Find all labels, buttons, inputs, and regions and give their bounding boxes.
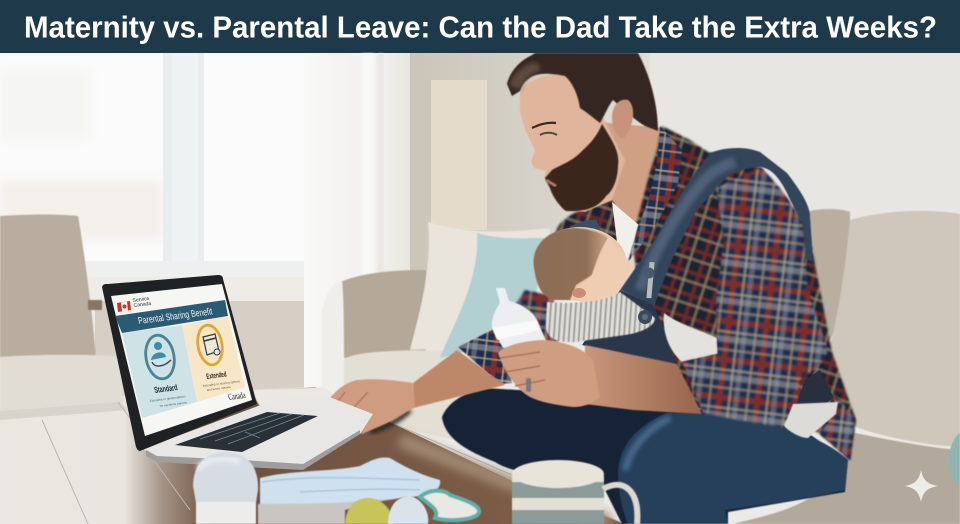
screen title: Parental Sharing Benefit: [137, 307, 214, 327]
extended label: Extended: [205, 370, 228, 381]
striped bib: [546, 262, 655, 342]
mug: [512, 460, 637, 524]
screen bezel: [102, 275, 257, 451]
standard caption: for eachtime parents: [159, 400, 188, 408]
wall: [405, 53, 670, 293]
right wall: [650, 53, 960, 223]
screen: [111, 284, 252, 436]
forearm reaching: [413, 350, 505, 408]
ear: [612, 100, 633, 138]
carrier panel: [582, 290, 676, 364]
sleeve near: [682, 168, 828, 427]
sofa right: [733, 209, 960, 524]
shirt torso: [632, 126, 856, 460]
beard: [545, 124, 618, 211]
forearm near: [585, 345, 702, 414]
service canada logo: [117, 296, 152, 312]
folded cloth: [258, 457, 440, 524]
teal ring: [420, 491, 479, 520]
icon: standard person: [142, 333, 178, 381]
white nipple: [388, 496, 428, 524]
laptop: [102, 275, 373, 470]
title: Maternity vs. Parental Leave: Can the Dad Take the Extra Weeks?: [24, 10, 937, 44]
shirt collar: [628, 126, 682, 262]
pillow blue: [440, 233, 545, 358]
keyboard key lines: [200, 413, 304, 444]
eye and brow: [532, 123, 557, 135]
baby bottle: [492, 288, 547, 348]
baby bottle foreground: [193, 452, 258, 524]
hair: [507, 53, 658, 131]
carrier strap left: [564, 220, 603, 240]
hair lighter front: [509, 62, 540, 90]
keyboard: [175, 412, 318, 452]
extended caption: and future options: [206, 385, 232, 392]
shirt sleeve upper arm: [500, 290, 558, 345]
baby sock: [784, 402, 838, 438]
mouth: [546, 180, 556, 186]
carrier strap highlight: [640, 162, 735, 290]
jeans: [442, 388, 848, 524]
baby: [533, 227, 634, 304]
standard label: Standard: [153, 382, 178, 395]
extended caption: [202, 379, 241, 392]
pacifier yellow: [345, 498, 393, 524]
curtain: [304, 53, 410, 398]
carrier strap: [620, 148, 813, 307]
rolled cuff: [458, 326, 512, 384]
white t-shirt: [612, 202, 640, 262]
wall under window: [95, 301, 310, 396]
standing lamp: [431, 80, 487, 230]
baby leg: [797, 370, 834, 412]
standard caption: Extended or ghateredistrict: [149, 394, 186, 403]
shirt left shoulder: [556, 200, 630, 250]
baby onesie: [664, 313, 718, 362]
sofa left arm: [322, 270, 455, 440]
sparkle icon: [905, 470, 938, 502]
laptop front edge: [146, 430, 360, 470]
standard panel: [122, 325, 197, 418]
extended caption: Extended or sharing options: [202, 379, 241, 388]
canada wordmark: Canada: [227, 390, 246, 402]
extended panel: [182, 316, 245, 402]
foreground items: [193, 452, 938, 524]
standard caption: [149, 394, 188, 408]
screen banner: [115, 300, 228, 333]
icon: extended calendar: [195, 323, 225, 367]
hand on trackpad: [322, 379, 415, 434]
title banner: [0, 0, 960, 52]
coffee table: [0, 387, 625, 524]
service canada logo: Service: [132, 296, 150, 304]
window: [0, 53, 310, 301]
face: [520, 75, 625, 212]
pillow cream: [410, 222, 550, 350]
shirt tail: [820, 392, 855, 460]
man: [322, 53, 856, 524]
service canada logo: Canada: [133, 301, 152, 309]
hand holding bottle: [498, 340, 600, 407]
laptop base: [143, 396, 373, 466]
armchair: [0, 214, 124, 412]
neck: [598, 122, 664, 234]
